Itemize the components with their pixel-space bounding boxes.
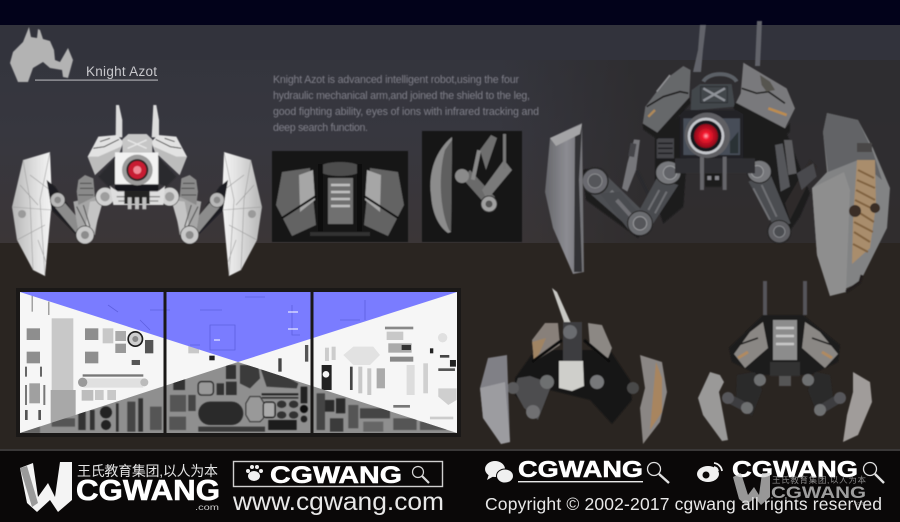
logo silhouette bbox=[10, 27, 73, 82]
head bbox=[675, 74, 755, 190]
antennas bbox=[116, 105, 159, 137]
white map details bbox=[25, 295, 457, 423]
white clay robot bbox=[12, 105, 262, 276]
main render robot bbox=[545, 21, 890, 296]
right shield bbox=[812, 113, 890, 296]
icon: magnifier bbox=[648, 462, 669, 483]
right arm bbox=[160, 175, 228, 244]
antennas bbox=[693, 21, 762, 72]
footer bbox=[0, 449, 900, 522]
icon: magnifier bbox=[412, 466, 429, 483]
copyright: Copyright © 2002-2017 cgwang all rights reserved bbox=[485, 494, 882, 514]
watermark logo: 王氏教育集团,以人为本 bbox=[772, 475, 866, 485]
watermark logo: .com bbox=[853, 501, 865, 507]
title: Knight Azot bbox=[35, 64, 158, 81]
right inner arm bbox=[747, 140, 817, 243]
shoulder plates bbox=[643, 63, 795, 139]
left inner arm bbox=[600, 138, 681, 236]
description text: hydraulic mechanical arm,and joined the shield to the leg, bbox=[273, 90, 530, 102]
sheet dividers bbox=[164, 289, 314, 436]
left shield bbox=[12, 152, 52, 276]
top view robot bbox=[698, 281, 872, 442]
dark chassis shadow bbox=[98, 157, 176, 187]
left arm bbox=[47, 175, 114, 244]
search box bbox=[234, 462, 442, 489]
shoulder plates bbox=[88, 135, 187, 175]
wechat handle bbox=[485, 456, 669, 483]
CGWANG wordmark: .com bbox=[195, 503, 219, 512]
thumbnail: arm and shield bbox=[422, 131, 522, 242]
description text: Knight Azot is advanced intelligent robot,using the four bbox=[273, 74, 519, 86]
left outer arm bbox=[582, 168, 650, 238]
rear view robot bbox=[480, 288, 667, 444]
head bbox=[110, 134, 165, 209]
slogan: 王氏教育集团,以人为本 bbox=[77, 463, 218, 479]
dark chassis bbox=[655, 102, 810, 240]
blue normal map triangle bbox=[20, 292, 457, 362]
title: Knight Azot: Knight Azot bbox=[86, 64, 157, 79]
website url: www.cgwang.com bbox=[232, 488, 444, 516]
texture sheet bbox=[16, 288, 461, 437]
weibo handle bbox=[697, 456, 884, 483]
description text: good fighting ability, eyes of ions with infrared tracking and bbox=[273, 106, 539, 118]
thumbnail: body front bbox=[272, 151, 408, 242]
watermark logo: CGWANG bbox=[771, 483, 866, 502]
watermark logo bbox=[733, 473, 866, 507]
red eye bbox=[122, 155, 153, 185]
icon: weibo bbox=[697, 463, 722, 482]
icon: paw bbox=[246, 465, 263, 481]
left shield bbox=[545, 123, 584, 274]
red eye bbox=[685, 113, 730, 158]
icon: W logo bbox=[20, 462, 72, 512]
icon: magnifier bbox=[864, 462, 884, 483]
search box: CGWANG bbox=[270, 462, 402, 489]
right shield bbox=[222, 152, 262, 276]
wechat handle: CGWANG bbox=[518, 456, 643, 482]
gray height map triangle bbox=[20, 362, 457, 433]
CGWANG wordmark: CGWANG bbox=[76, 475, 220, 507]
description text bbox=[273, 74, 539, 134]
weibo handle: CGWANG bbox=[732, 456, 858, 482]
description text: deep search function. bbox=[273, 122, 368, 134]
icon: wechat bbox=[485, 461, 514, 483]
